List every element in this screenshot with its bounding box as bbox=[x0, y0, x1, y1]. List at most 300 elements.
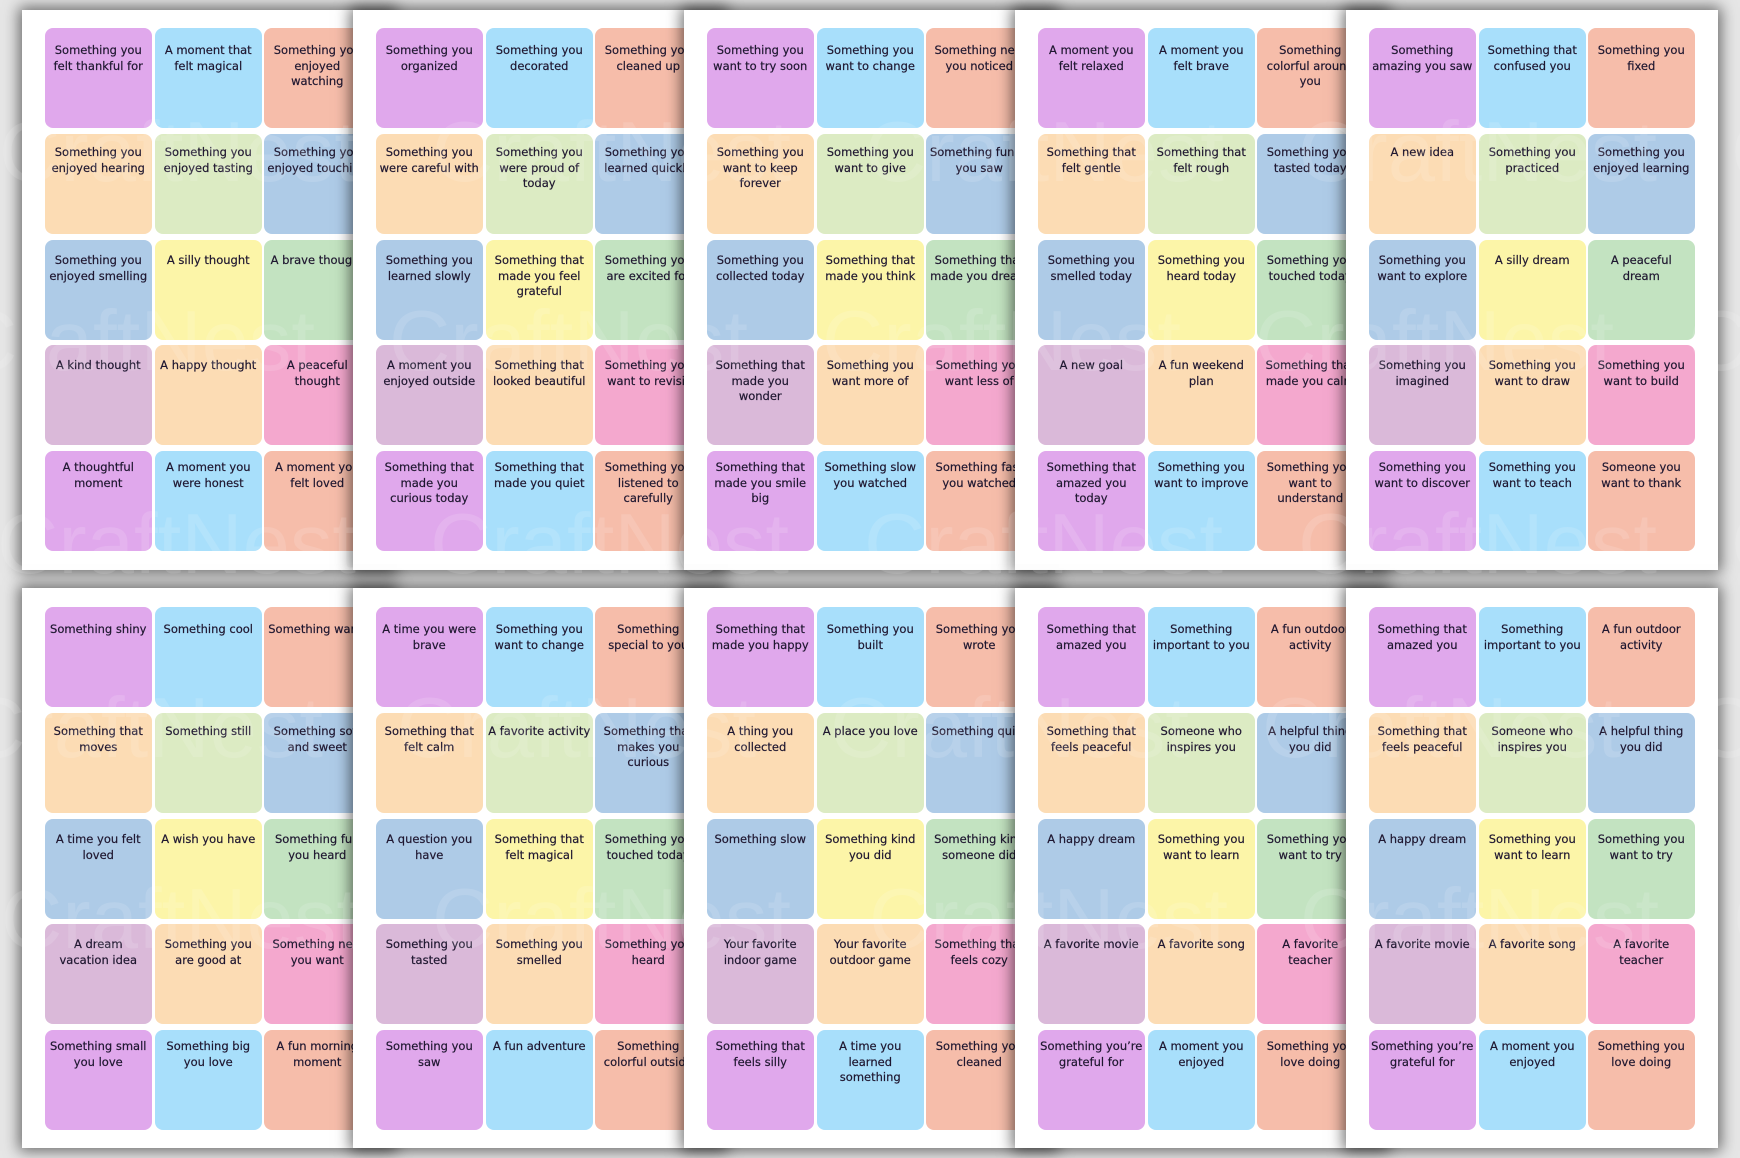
card: moves: moves bbox=[79, 740, 117, 754]
card: favorite teacher: A favorite bbox=[1282, 937, 1338, 951]
card: kind thought: A kind thought bbox=[56, 358, 141, 372]
card: saw: Something you bbox=[386, 1039, 473, 1053]
card: smelled today bbox=[1038, 240, 1144, 340]
card: cool: Something cool bbox=[164, 622, 253, 636]
watermark: tiled CraftNest text: CraftNest bbox=[389, 294, 748, 389]
card: soft and sweet: and sweet bbox=[288, 740, 347, 754]
card: peaceful thought: thought bbox=[295, 374, 340, 388]
card: outdoor activity: activity bbox=[1289, 638, 1331, 652]
card: want to change bbox=[486, 607, 592, 707]
card: cleaned bbox=[926, 1030, 1032, 1130]
card: smelled today: Something you bbox=[1048, 253, 1135, 267]
card: try soon bbox=[707, 28, 814, 128]
card: heard bbox=[595, 924, 702, 1024]
card: enjoyed touching bbox=[264, 134, 370, 234]
card: organized bbox=[376, 28, 482, 128]
card: felt calm bbox=[376, 713, 482, 813]
card: new idea bbox=[1369, 134, 1476, 234]
card: proud of today bbox=[486, 134, 592, 234]
card: want to revisit: Something you bbox=[605, 358, 692, 372]
card: moment enjoyed: enjoyed bbox=[1178, 1054, 1224, 1068]
card: want to discover bbox=[1369, 451, 1476, 551]
card: fixed: fixed bbox=[1627, 58, 1655, 72]
watermark: tiled CraftNest text: CraftNest bbox=[1300, 872, 1659, 967]
card: fun morning bbox=[264, 1030, 370, 1130]
card: enjoyed hearing: Something you bbox=[55, 145, 142, 159]
watermark: tiled CraftNest text: CraftNest bbox=[864, 497, 1223, 592]
card: collected today bbox=[707, 240, 814, 340]
card: felt relaxed: felt relaxed bbox=[1059, 58, 1124, 72]
card: outdoor activity bbox=[1257, 607, 1364, 707]
card: amazed you: Something that bbox=[1047, 622, 1136, 636]
card: enjoyed outside bbox=[376, 345, 482, 445]
card: want to learn bbox=[1148, 819, 1254, 919]
card: moment enjoyed: A moment you bbox=[1159, 1039, 1244, 1053]
card: new want: Something new bbox=[272, 937, 362, 951]
card: want to thank: want to thank bbox=[1601, 476, 1681, 490]
card: built: built bbox=[858, 638, 883, 652]
card: felt magical: A moment that bbox=[165, 43, 252, 57]
card: felt calm: Something that bbox=[385, 724, 474, 738]
card: smelled: smelled bbox=[517, 952, 562, 966]
card: feels peaceful: Something that bbox=[1378, 724, 1467, 738]
card: good at: are good at bbox=[175, 952, 241, 966]
card: indoor game bbox=[707, 924, 814, 1024]
card: tasted today: Something you bbox=[1267, 145, 1354, 159]
card: feels silly bbox=[707, 1030, 814, 1130]
card: kind thought bbox=[45, 345, 152, 445]
card: grateful for bbox=[1369, 1030, 1476, 1130]
card: felt loved: A time you felt bbox=[56, 832, 141, 846]
card: felt gentle: felt gentle bbox=[1062, 160, 1121, 174]
card: place you love: A place you love bbox=[823, 724, 918, 738]
card: important bbox=[1148, 607, 1254, 707]
card: want to change bbox=[817, 28, 924, 128]
card: feels cozy bbox=[926, 924, 1032, 1024]
card: thing collected: A thing you bbox=[727, 724, 793, 738]
card: learned something: A time you bbox=[839, 1039, 901, 1053]
card: made you wonder: Something that bbox=[716, 358, 805, 372]
watermark: tiled CraftNest text: CraftNest bbox=[1298, 497, 1657, 592]
card: want to learn: want to learn bbox=[1494, 848, 1570, 862]
card: want to discover: Something you bbox=[1379, 460, 1466, 474]
card: wish bbox=[155, 819, 262, 919]
card: imagined: Something you bbox=[1379, 358, 1466, 372]
card: happy dream: A happy dream bbox=[1378, 832, 1466, 846]
card: feels peaceful: feels peaceful bbox=[1051, 740, 1131, 754]
card: touched today: Something you bbox=[1267, 253, 1354, 267]
card: heard today bbox=[1148, 240, 1254, 340]
card: want less of: Something you bbox=[936, 358, 1023, 372]
card: want to learn bbox=[1479, 819, 1586, 919]
card: felt gentle: Something that bbox=[1047, 145, 1136, 159]
card: saw: saw bbox=[418, 1054, 440, 1068]
card: favorite teacher: teacher bbox=[1619, 952, 1663, 966]
card: peaceful thought bbox=[264, 345, 370, 445]
card: made you dream: made you dream bbox=[930, 268, 1028, 282]
card: enjoyed tasting: enjoyed tasting bbox=[164, 160, 253, 174]
card: kind you did: Something kind bbox=[825, 832, 915, 846]
worksheet page 1, top row bbox=[22, 10, 394, 570]
card: want to explore: Something you bbox=[1379, 253, 1466, 267]
card: peaceful dream: dream bbox=[1623, 268, 1660, 282]
card: thoughtful moment bbox=[45, 451, 152, 551]
card: makes you curious bbox=[595, 713, 702, 813]
card: made you happy: Something that bbox=[716, 622, 805, 636]
card: heard today: Something you bbox=[1158, 253, 1245, 267]
card: were brave: A time you were bbox=[382, 622, 476, 636]
card: outdoor activity bbox=[1588, 607, 1694, 707]
card: happy dream: A happy dream bbox=[1047, 832, 1135, 846]
card: dream vacation bbox=[45, 924, 152, 1024]
card: big love: you love bbox=[184, 1054, 233, 1068]
card: want to draw: want to draw bbox=[1494, 374, 1570, 388]
card: colorful around you: Something bbox=[1279, 43, 1341, 57]
card: excited for bbox=[595, 240, 702, 340]
card: enjoyed watching: Something you bbox=[274, 43, 361, 57]
card: want to improve: want to improve bbox=[1154, 476, 1248, 490]
card: enjoyed touching: Something you bbox=[274, 145, 361, 159]
card: indoor game: indoor game bbox=[724, 952, 797, 966]
card: made you quiet bbox=[486, 451, 592, 551]
card: want to change: Something you bbox=[496, 622, 583, 636]
card: love doing bbox=[1588, 1030, 1694, 1130]
card: new noticed: you noticed bbox=[945, 58, 1013, 72]
card: proud of today: were proud of bbox=[499, 160, 579, 174]
card: slow watched: Something slow bbox=[824, 460, 916, 474]
card: outdoor game bbox=[817, 924, 924, 1024]
worksheet page 5, top row bbox=[1346, 10, 1718, 570]
card: fun heard bbox=[264, 819, 370, 919]
worksheet page 6, bottom row bbox=[22, 588, 394, 1148]
card: thing collected: collected bbox=[734, 740, 786, 754]
card: fast watched: you watched bbox=[942, 476, 1016, 490]
card: want more of: want more of bbox=[832, 374, 908, 388]
card: felt brave bbox=[1148, 28, 1254, 128]
card: helpful thing: A helpful thing bbox=[1599, 724, 1683, 738]
card: want to build: want to build bbox=[1604, 374, 1679, 388]
card: heard today: heard today bbox=[1166, 268, 1236, 282]
card: enjoyed watching bbox=[264, 28, 370, 128]
card: fun morning: moment bbox=[293, 1054, 341, 1068]
card: feels silly: feels silly bbox=[734, 1054, 787, 1068]
card: want to try: Something you bbox=[1267, 832, 1354, 846]
card: made you happy bbox=[707, 607, 814, 707]
card: felt magical: felt magical bbox=[174, 58, 242, 72]
watermark: tiled CraftNest text: CraftNest bbox=[1298, 105, 1657, 200]
card: small love: you love bbox=[74, 1054, 123, 1068]
card: outdoor activity: activity bbox=[1620, 638, 1662, 652]
card: felt loved: A moment you bbox=[275, 460, 360, 474]
card: new noticed: Something new bbox=[934, 43, 1024, 57]
card: funny saw bbox=[926, 134, 1032, 234]
card: important: important to you bbox=[1153, 638, 1250, 652]
watermark: tiled CraftNest text: CraftNest bbox=[432, 872, 791, 967]
card: fun weekend plan bbox=[1148, 345, 1254, 445]
card: want to explore bbox=[1369, 240, 1476, 340]
card: helpful thing bbox=[1257, 713, 1364, 813]
card: outdoor activity: A fun outdoor bbox=[1271, 622, 1350, 636]
card: fun heard: Something fun bbox=[275, 832, 359, 846]
card: still bbox=[155, 713, 262, 813]
card: brave thought: A brave thought bbox=[271, 253, 364, 267]
card: favorite movie: A favorite movie bbox=[1044, 937, 1139, 951]
card: favorite song: A favorite song bbox=[1158, 937, 1245, 951]
card: outdoor game: Your favorite bbox=[834, 937, 907, 951]
card: amazed you today: today bbox=[1075, 491, 1108, 505]
watermark: tiled CraftNest text: CraftNest bbox=[822, 294, 1181, 389]
card: smelled today: smelled today bbox=[1051, 268, 1132, 282]
card: slow: Something slow bbox=[714, 832, 806, 846]
card: peaceful dream: A peaceful bbox=[1611, 253, 1672, 267]
card: made you think: made you think bbox=[825, 268, 915, 282]
card: love doing: Something you bbox=[1267, 1039, 1354, 1053]
card: wish: A wish you have bbox=[161, 832, 255, 846]
watermark: tiled CraftNest text: CraftNest bbox=[0, 105, 358, 200]
card: happy dream bbox=[1038, 819, 1144, 919]
card: smile big bbox=[707, 451, 814, 551]
card: made you think bbox=[817, 240, 924, 340]
card: made you happy: made you happy bbox=[712, 638, 809, 652]
card: want to try bbox=[1588, 819, 1694, 919]
card: want to build: Something you bbox=[1598, 358, 1685, 372]
card: helpful thing: you did bbox=[1620, 740, 1663, 754]
card: dream vacation: A dream bbox=[74, 937, 123, 951]
card: inspires you bbox=[1479, 713, 1586, 813]
card: made you quiet: made you quiet bbox=[494, 476, 584, 490]
card: moment enjoyed bbox=[1148, 1030, 1254, 1130]
card: moment enjoyed bbox=[1479, 1030, 1586, 1130]
card: want to give: Something you bbox=[827, 145, 914, 159]
card: helpful thing: A helpful thing bbox=[1268, 724, 1352, 738]
card: feel grateful: grateful bbox=[517, 284, 562, 298]
watermark: tiled CraftNest text: CraftNest bbox=[865, 105, 1224, 200]
card: happy thought: A happy thought bbox=[160, 358, 256, 372]
card: tasted: tasted bbox=[411, 952, 447, 966]
card: important: Something bbox=[1170, 622, 1232, 636]
card: felt loved bbox=[45, 819, 152, 919]
card: want to learn: Something you bbox=[1489, 832, 1576, 846]
card: learned slowly bbox=[376, 240, 482, 340]
worksheet page 7, bottom row bbox=[353, 588, 725, 1148]
card: feels peaceful: feels peaceful bbox=[1382, 740, 1462, 754]
card: made you calm: made you calm bbox=[1266, 374, 1355, 388]
card: important bbox=[1479, 607, 1586, 707]
card: felt magical bbox=[486, 819, 592, 919]
card: important: Something bbox=[1501, 622, 1563, 636]
card: shiny bbox=[45, 607, 152, 707]
card: want to revisit: want to revisit bbox=[607, 374, 689, 388]
card: proud of today: today bbox=[523, 176, 556, 190]
card: felt brave: felt brave bbox=[1174, 58, 1229, 72]
card: happy thought bbox=[155, 345, 262, 445]
card: favorite movie bbox=[1038, 924, 1144, 1024]
card: funny saw: Something funny bbox=[930, 145, 1029, 159]
card: want to learn: Something you bbox=[1158, 832, 1245, 846]
card: helpful thing: you did bbox=[1289, 740, 1332, 754]
card: colorful around you: colorful around bbox=[1267, 58, 1354, 72]
card: peaceful dream bbox=[1588, 240, 1694, 340]
watermark: tiled CraftNest text: CraftNest bbox=[397, 681, 756, 776]
card: enjoyed smelling bbox=[45, 240, 152, 340]
card: moment enjoyed: enjoyed bbox=[1509, 1054, 1555, 1068]
card: felt loved bbox=[264, 451, 370, 551]
card: grateful for: grateful for bbox=[1059, 1054, 1124, 1068]
card: makes you curious: Something that bbox=[604, 724, 693, 738]
card: fun adventure: A fun adventure bbox=[493, 1039, 586, 1053]
card: peaceful thought: A peaceful bbox=[287, 358, 348, 372]
card: colorful outside bbox=[595, 1030, 702, 1130]
card: kind someone did bbox=[926, 819, 1032, 919]
card: enjoyed smelling: Something you bbox=[55, 253, 142, 267]
card: learned slowly: learned slowly bbox=[388, 268, 471, 282]
card: decorated bbox=[486, 28, 592, 128]
card: quiet: Something quiet bbox=[932, 724, 1027, 738]
card: feels peaceful bbox=[1038, 713, 1144, 813]
card: love doing: love doing bbox=[1280, 1054, 1340, 1068]
card: place you love bbox=[817, 713, 924, 813]
card: good at: Something you bbox=[165, 937, 252, 951]
card: amazed you: amazed you bbox=[1387, 638, 1458, 652]
card: listened to carefully: carefully bbox=[624, 491, 673, 505]
card: fun adventure bbox=[486, 1030, 592, 1130]
card: enjoyed hearing bbox=[45, 134, 152, 234]
card: want to thank: Someone you bbox=[1602, 460, 1681, 474]
card: enjoyed tasting: Something you bbox=[165, 145, 252, 159]
card: touched today: touched today bbox=[1269, 268, 1352, 282]
card: cleaned: Something you bbox=[936, 1039, 1023, 1053]
card: tasted today: tasted today bbox=[1274, 160, 1347, 174]
card: made you dream bbox=[926, 240, 1032, 340]
card: inspires you: inspires you bbox=[1498, 740, 1567, 754]
card: touched today: Something you bbox=[605, 832, 692, 846]
card: try soon: Something you bbox=[717, 43, 804, 57]
card: felt rough bbox=[1148, 134, 1254, 234]
card: favorite movie bbox=[1369, 924, 1476, 1024]
card: heard: Something you bbox=[605, 937, 692, 951]
card: organized: Something you bbox=[386, 43, 473, 57]
card: saw bbox=[376, 1030, 482, 1130]
card: makes you curious: curious bbox=[627, 755, 669, 769]
card: special to you: Something bbox=[617, 622, 679, 636]
card: feels silly: Something that bbox=[716, 1039, 805, 1053]
card: want to teach bbox=[1479, 451, 1586, 551]
card: new idea: A new idea bbox=[1390, 145, 1454, 159]
card: favorite song: A favorite song bbox=[1489, 937, 1576, 951]
card: touched today: touched today bbox=[607, 848, 690, 862]
card: inspires you bbox=[1148, 713, 1254, 813]
card: curious today bbox=[376, 451, 482, 551]
card: fast watched bbox=[926, 451, 1032, 551]
card: amazed you today: Something that bbox=[1047, 460, 1136, 474]
card: favorite song bbox=[1479, 924, 1586, 1024]
card: enjoyed learning bbox=[1588, 134, 1694, 234]
card: grateful for bbox=[1038, 1030, 1144, 1130]
card: grateful for: Something you’re bbox=[1040, 1039, 1142, 1053]
card: want less of: want less of bbox=[945, 374, 1014, 388]
card: made you calm bbox=[1257, 345, 1364, 445]
card: felt thankful bbox=[45, 28, 152, 128]
card: practiced: Something you bbox=[1489, 145, 1576, 159]
card: want to try: Something you bbox=[1598, 832, 1685, 846]
card: favorite activity: A favorite activity bbox=[488, 724, 590, 738]
watermark: tiled CraftNest text: CraftNest bbox=[1255, 294, 1614, 389]
card: amazing you saw bbox=[1369, 28, 1476, 128]
card: cleaned: cleaned bbox=[957, 1054, 1002, 1068]
card: thing collected bbox=[707, 713, 814, 813]
card: moment enjoyed: A moment you bbox=[1490, 1039, 1575, 1053]
card: fun heard: you heard bbox=[288, 848, 346, 862]
card: want to discover: want to discover bbox=[1374, 476, 1470, 490]
card: made you quiet: Something that bbox=[495, 460, 584, 474]
card: kind someone did: someone did bbox=[942, 848, 1016, 862]
card: felt magical: felt magical bbox=[505, 848, 573, 862]
card: enjoyed smelling: enjoyed smelling bbox=[49, 268, 147, 282]
card: heard: heard bbox=[632, 952, 665, 966]
card: outdoor game: outdoor game bbox=[830, 952, 911, 966]
card: favorite song bbox=[1148, 924, 1254, 1024]
card: silly thought bbox=[155, 240, 262, 340]
card: keep forever: forever bbox=[740, 176, 781, 190]
card: made you think: Something that bbox=[826, 253, 915, 267]
card: inspires you: Someone who bbox=[1492, 724, 1573, 738]
card: grateful for: grateful for bbox=[1390, 1054, 1455, 1068]
card: collected today: collected today bbox=[716, 268, 804, 282]
card: thoughtful moment: A thoughtful bbox=[63, 460, 134, 474]
card: wrote: Something you bbox=[936, 622, 1023, 636]
card: were careful with bbox=[376, 134, 482, 234]
card: practiced bbox=[1479, 134, 1586, 234]
card: listened to carefully: listened to bbox=[618, 476, 679, 490]
card: cool bbox=[155, 607, 262, 707]
card: amazed you today bbox=[1038, 451, 1144, 551]
card: want to understand: want to bbox=[1289, 476, 1332, 490]
card: amazed you today: amazed you bbox=[1056, 476, 1126, 490]
card: want to understand: understand bbox=[1277, 491, 1343, 505]
card: want to improve: Something you bbox=[1158, 460, 1245, 474]
card: felt relaxed: A moment you bbox=[1049, 43, 1134, 57]
card: special to you bbox=[595, 607, 702, 707]
card: shiny: Something shiny bbox=[50, 622, 146, 636]
card: feels peaceful bbox=[1369, 713, 1476, 813]
card: fixed bbox=[1588, 28, 1694, 128]
card: wrote bbox=[926, 607, 1032, 707]
card: big love: Something big bbox=[166, 1039, 250, 1053]
card: want to learn: want to learn bbox=[1163, 848, 1239, 862]
card: amazing you saw: amazing you saw bbox=[1372, 58, 1472, 72]
card: quiet bbox=[926, 713, 1032, 813]
card: feels cozy: feels cozy bbox=[951, 952, 1008, 966]
card: indoor game: Your favorite bbox=[724, 937, 797, 951]
card: amazed you: amazed you bbox=[1056, 638, 1126, 652]
card: love doing: love doing bbox=[1611, 1054, 1671, 1068]
card: cleaned up bbox=[595, 28, 702, 128]
card: kind someone did: Something kind bbox=[934, 832, 1024, 846]
card: want to change: Something you bbox=[827, 43, 914, 57]
card: listened to carefully: Something you bbox=[605, 460, 692, 474]
card: learned quickly: learned quickly bbox=[604, 160, 692, 174]
card: made you wonder: wonder bbox=[739, 389, 782, 403]
card: practiced: practiced bbox=[1505, 160, 1559, 174]
watermark: tiled CraftNest text: CraftNest bbox=[1, 872, 360, 967]
card: want to try bbox=[1257, 819, 1364, 919]
card: still: Something still bbox=[165, 724, 251, 738]
card: want to draw bbox=[1479, 345, 1586, 445]
card: fun weekend plan: A fun weekend bbox=[1159, 358, 1244, 372]
worksheet page 10, bottom row bbox=[1346, 588, 1718, 1148]
card: confused you: Something that bbox=[1488, 43, 1577, 57]
card: want less of bbox=[926, 345, 1032, 445]
